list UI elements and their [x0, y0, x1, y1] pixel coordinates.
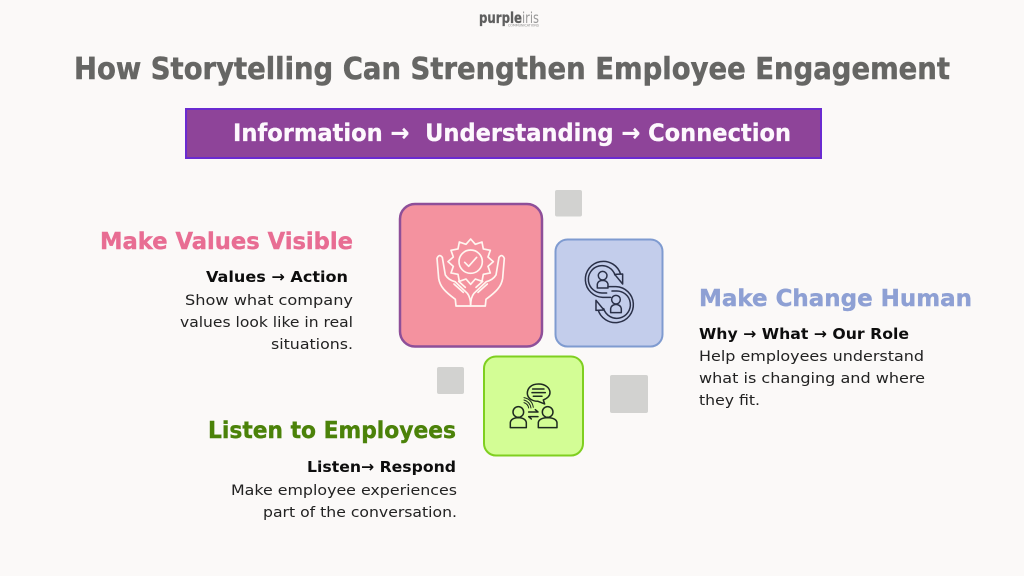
description: change: Help employees understand: [699, 349, 924, 365]
icon: two people in conversation: [510, 384, 557, 428]
description: listen: Make employee experiences: [231, 483, 457, 499]
description: listen: part of the conversation.: [263, 505, 457, 521]
banner: Information → Understanding → Connection: [233, 119, 791, 147]
subheading: values to action: Values → Action: [206, 268, 348, 286]
description: listen: [231, 483, 457, 521]
panel: listen to employees text: [208, 418, 457, 521]
icon: rotating people: [585, 261, 633, 323]
description: values: values look like in real: [180, 315, 353, 331]
description: values: [180, 293, 353, 353]
icon: hands holding badge: [437, 239, 504, 306]
panel: make values visible text: [100, 229, 353, 353]
description: change: [699, 349, 925, 409]
logo: purple: [479, 9, 522, 27]
subheading: why what our role: Why → What → Our Role: [699, 325, 909, 343]
decorative grey square: right: [610, 375, 648, 413]
description: values: situations.: [271, 337, 353, 353]
title: How Storytelling Can Strengthen Employee Engagement: [74, 52, 950, 87]
description: change: what is changing and where: [699, 371, 925, 387]
decorative grey square: top: [555, 190, 582, 216]
logo: iris: [522, 9, 539, 27]
heading: make values visible: Make Values Visible: [100, 229, 353, 255]
heading: make change human: Make Change Human: [699, 286, 972, 312]
heading: listen to employees: Listen to Employees: [208, 418, 456, 444]
description: change: they fit.: [699, 393, 760, 409]
panel: green card with listening icon: [484, 356, 583, 456]
logo: COMMUNICATIONS: [508, 24, 540, 28]
panel: pink card with values icon: [400, 204, 542, 346]
subheading: listen respond: Listen→ Respond: [307, 458, 456, 476]
decorative grey square: left: [437, 367, 464, 394]
panel: blue card with change icon: [556, 240, 662, 346]
description: values: Show what company: [185, 293, 353, 309]
banner: [186, 109, 821, 158]
panel: make change human text: [699, 286, 972, 409]
